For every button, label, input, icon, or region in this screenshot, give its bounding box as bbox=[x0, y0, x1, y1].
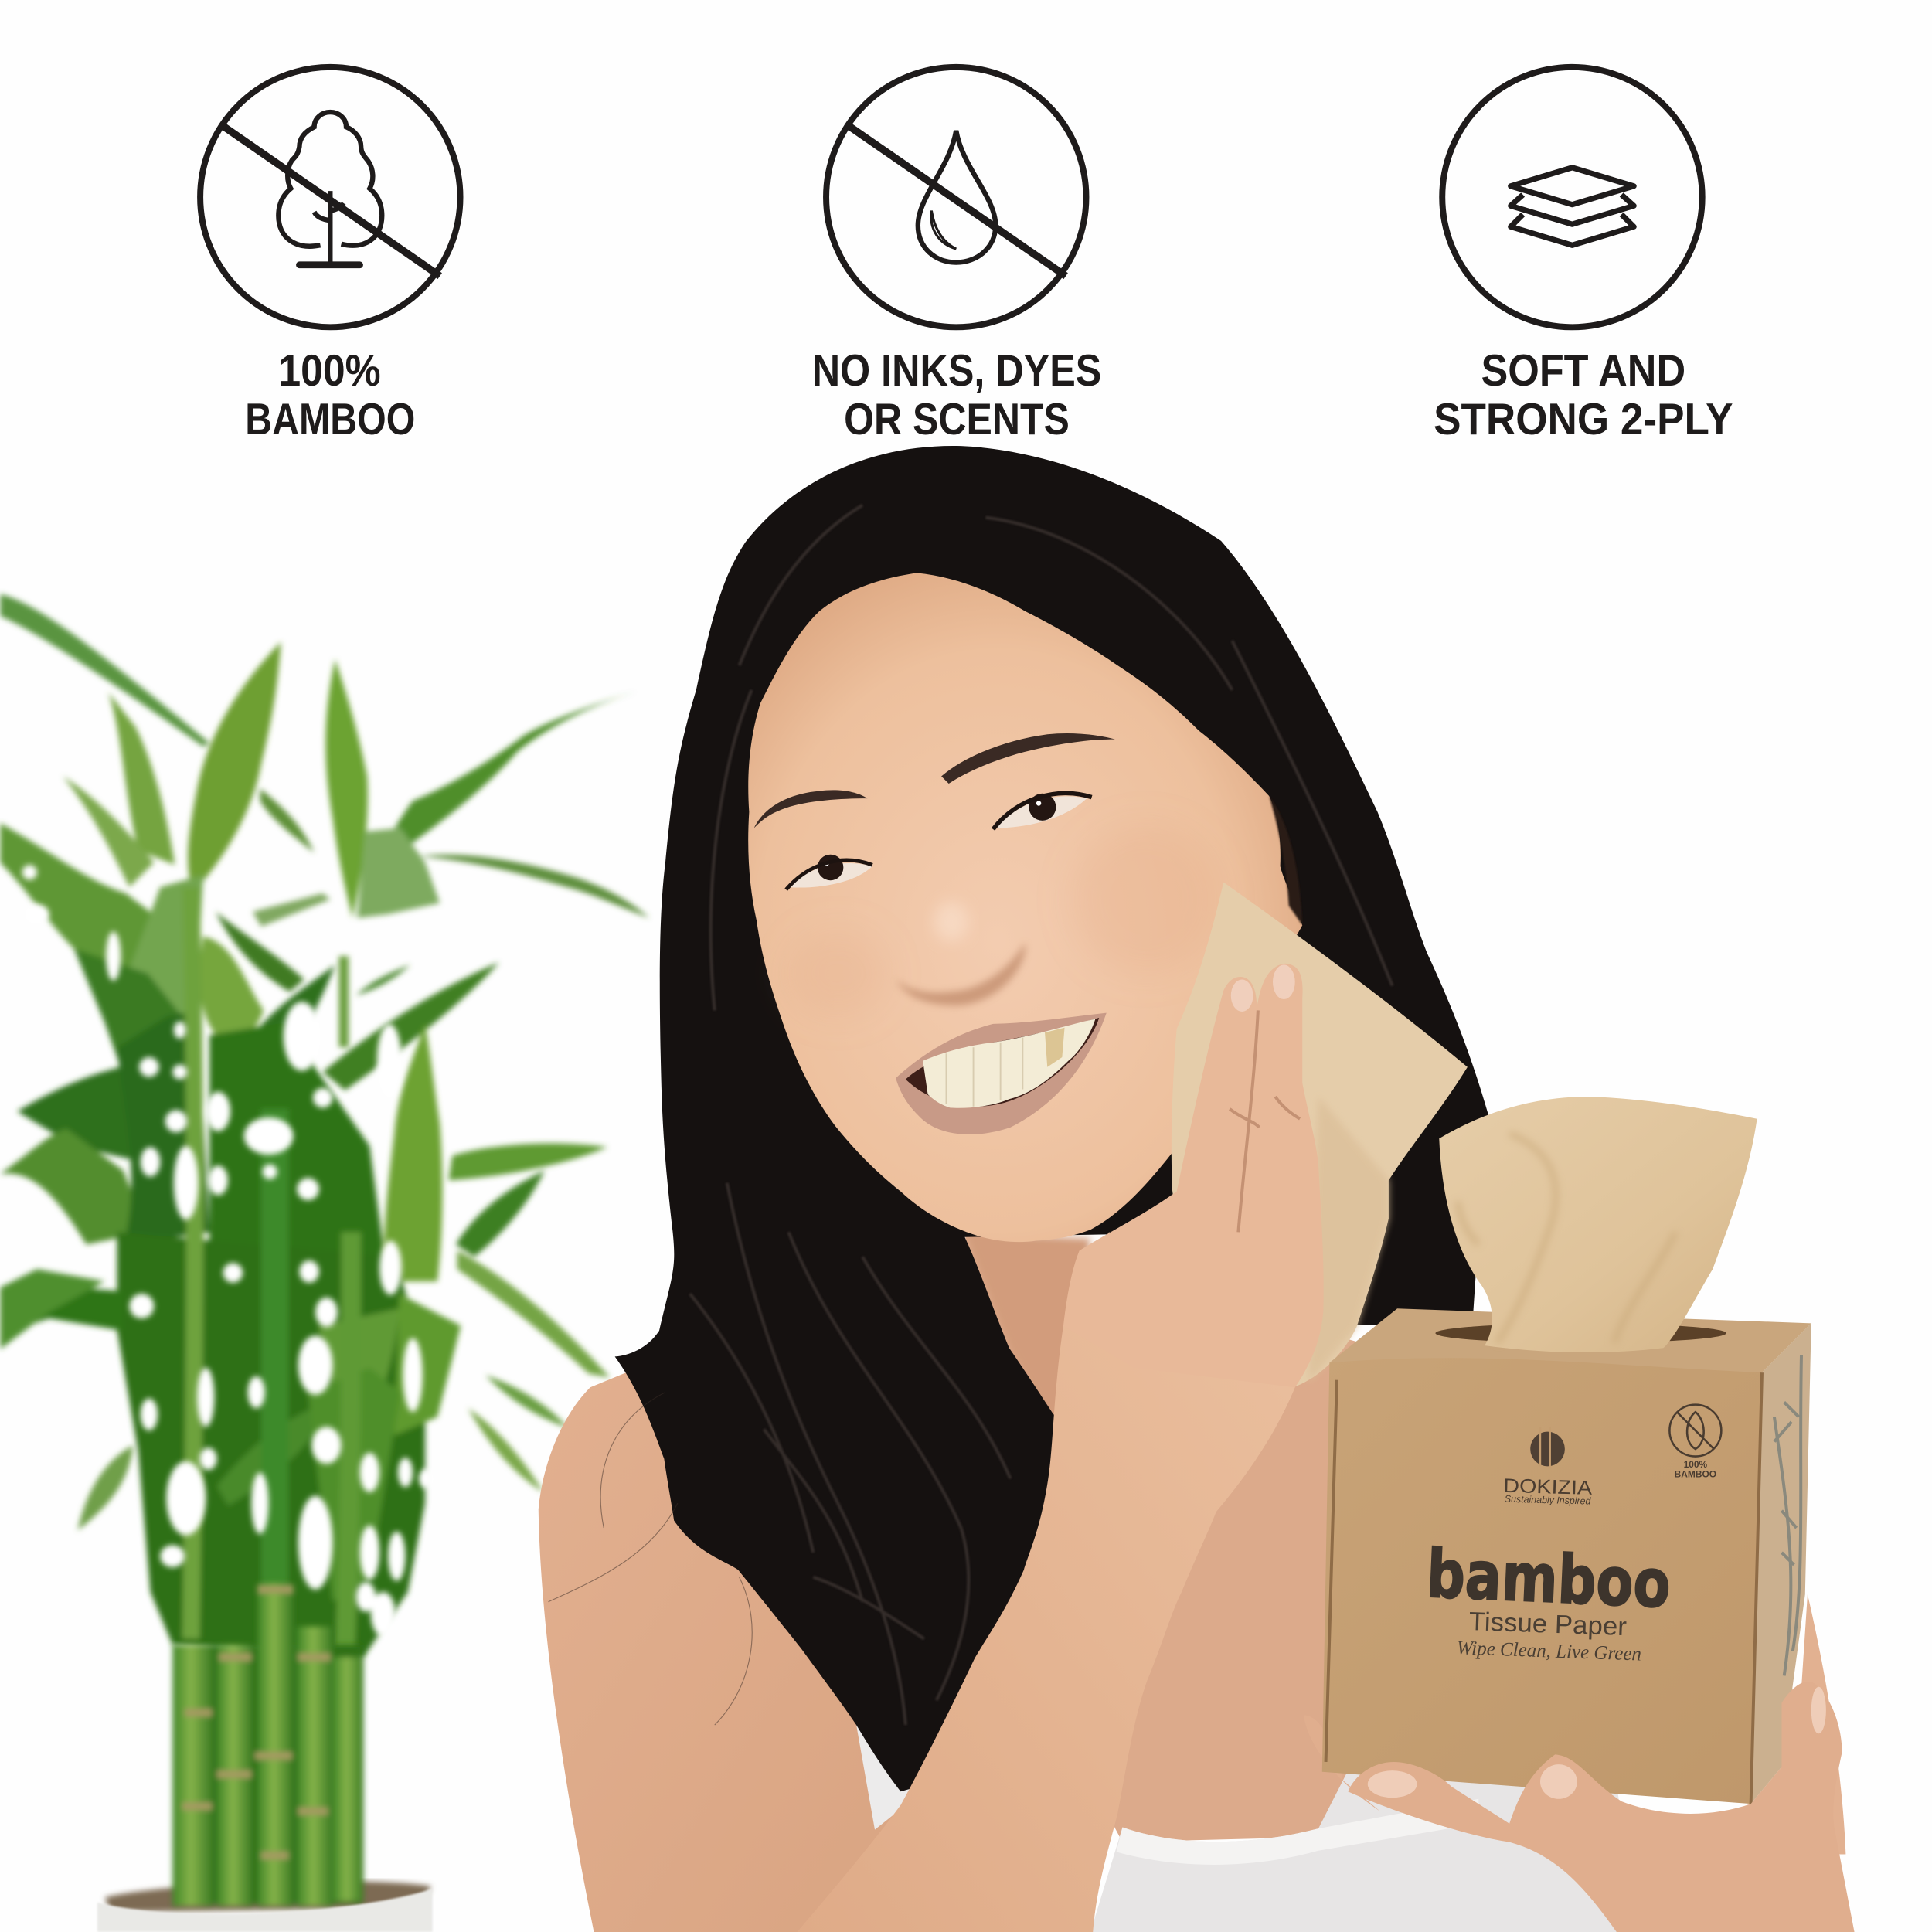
plant pot bbox=[97, 1889, 433, 1932]
hand finger behind box bbox=[1304, 1715, 1380, 1811]
fingernails bbox=[1368, 1687, 1826, 1799]
box fold edges bbox=[1326, 1372, 1762, 1804]
logo text: Sustainably Inspired bbox=[1505, 1493, 1592, 1507]
nose bbox=[896, 902, 1026, 1005]
smile bbox=[896, 1013, 1107, 1134]
bamboo stalks bbox=[172, 1583, 363, 1906]
label: no inks, dyes or scents: OR SCENTS bbox=[844, 395, 1070, 444]
box side face bbox=[1751, 1323, 1811, 1804]
hair highlights bbox=[690, 505, 1393, 1725]
box front face bbox=[1322, 1358, 1762, 1804]
box tagline: Wipe Clean, Live Green bbox=[1456, 1636, 1641, 1665]
gaps of light between leaves bbox=[22, 865, 434, 1636]
label: no inks, dyes or scents: NO INKS, DYES bbox=[812, 346, 1101, 396]
chest and neck bbox=[964, 1232, 1362, 1842]
label: soft and strong 2-ply bbox=[1434, 346, 1733, 444]
ear shadow bbox=[1269, 796, 1302, 925]
tank top strap bbox=[856, 1725, 918, 1830]
box subtitle: Tissue Paper bbox=[1468, 1607, 1628, 1641]
right forearm bbox=[1799, 1594, 1845, 1855]
mini icon label: 100% bbox=[1684, 1459, 1708, 1470]
plant leaves and foliage bbox=[0, 594, 649, 1657]
forearm bbox=[798, 1232, 1323, 1932]
hand on cheek bbox=[1063, 964, 1324, 1387]
white tank top bbox=[1090, 1768, 1639, 1932]
right eye bbox=[993, 793, 1092, 829]
mini icon label: BAMBOO bbox=[1675, 1469, 1716, 1480]
bamboo drawing on side bbox=[1774, 1355, 1801, 1675]
fingernails and creases bbox=[1230, 964, 1300, 1232]
tissue shading bbox=[1308, 1097, 1389, 1383]
palm and fingers bbox=[1348, 1682, 1855, 1932]
tissue folds bbox=[1458, 1134, 1675, 1343]
woman with tissue bbox=[539, 446, 1845, 1932]
label: 100% bamboo: BAMBOO bbox=[245, 395, 415, 444]
blurred bamboo plant bbox=[0, 594, 649, 1932]
icon: no drop (no inks, dyes or scents) bbox=[826, 67, 1086, 327]
box opening bbox=[1435, 1323, 1726, 1343]
tissue pulled from box bbox=[1439, 1097, 1757, 1352]
logo text bbox=[1503, 1475, 1593, 1507]
tissue box bbox=[1322, 1097, 1811, 1804]
logo text: DOKIZIA bbox=[1503, 1475, 1593, 1499]
label: 100% bamboo bbox=[245, 346, 415, 444]
box top face bbox=[1329, 1308, 1811, 1372]
hand holding box bbox=[1348, 1682, 1855, 1932]
face bbox=[748, 573, 1302, 1242]
stray hairs on shoulder bbox=[549, 1393, 752, 1725]
logo emblem bbox=[1530, 1427, 1565, 1469]
eyebrows bbox=[754, 733, 1115, 828]
freckles and blush bbox=[788, 825, 1219, 1016]
left eye bbox=[786, 855, 872, 889]
upper arm and shoulder bbox=[539, 1362, 906, 1932]
mini icon label bbox=[1675, 1459, 1716, 1480]
tissue on cheek bbox=[1172, 883, 1468, 1386]
neck shadow bbox=[964, 1232, 1090, 1429]
label: soft and strong 2-ply: STRONG 2-PLY bbox=[1434, 395, 1733, 444]
label: no inks, dyes or scents bbox=[812, 346, 1101, 444]
pot soil bbox=[105, 1881, 431, 1912]
mini icon: no tree bbox=[1669, 1405, 1721, 1457]
hair bbox=[615, 446, 1488, 1791]
icon: stacked layers (2-ply) bbox=[1442, 67, 1702, 327]
label: 100% bamboo: 100% bbox=[278, 346, 381, 396]
box wordmark bamboo: bamboo bbox=[1425, 1536, 1672, 1624]
icon: no tree (100% bamboo) bbox=[200, 67, 461, 327]
label: soft and strong 2-ply: SOFT AND bbox=[1481, 346, 1685, 396]
